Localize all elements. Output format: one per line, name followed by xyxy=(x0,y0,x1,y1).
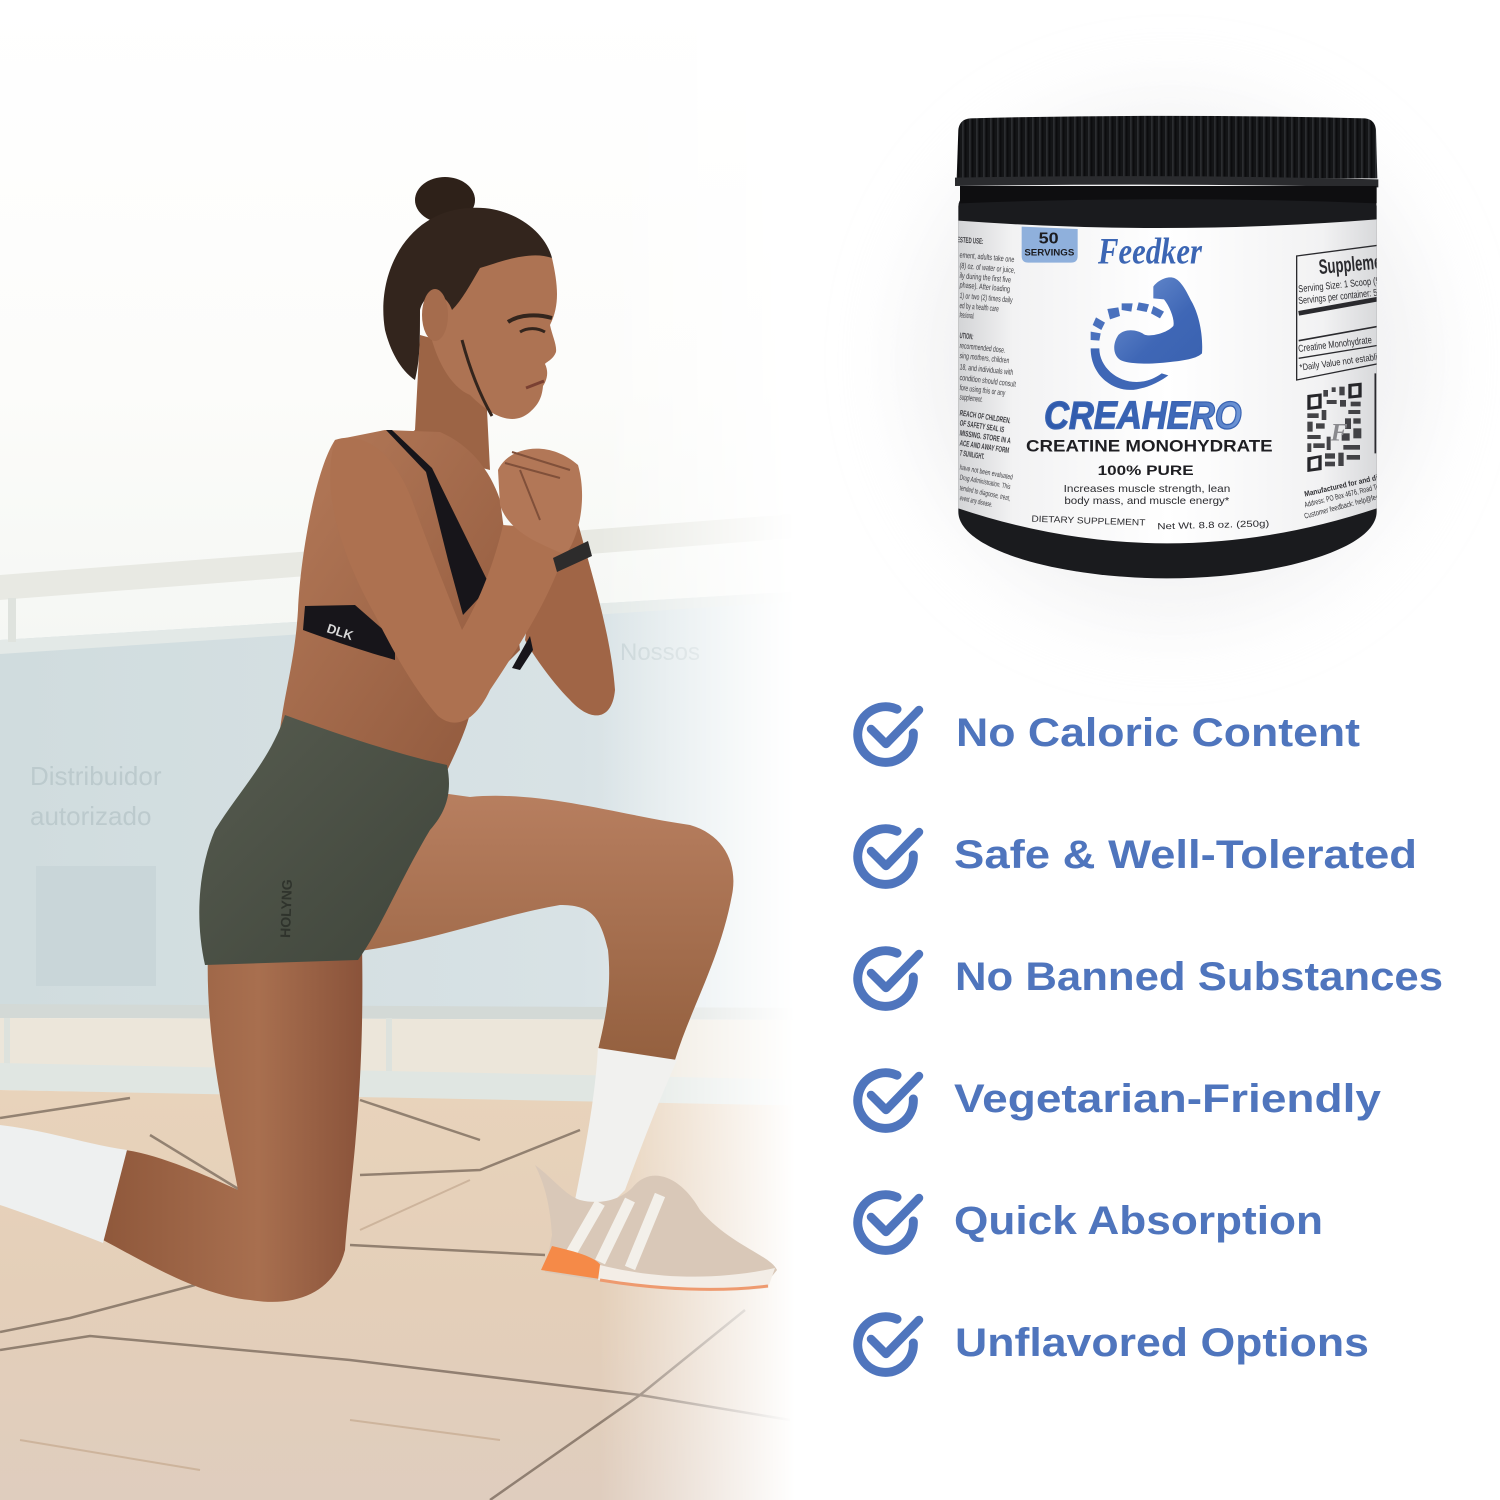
wristwatch xyxy=(553,541,592,572)
supplement facts panel xyxy=(1297,245,1395,453)
left side directions text: tended to diagnose, treat, xyxy=(959,483,1011,503)
left side directions text: ACE AND AWAY FORM xyxy=(959,438,1010,455)
QR code: F xyxy=(1330,419,1348,447)
servings tag xyxy=(1022,227,1078,263)
flexed arm logo xyxy=(1091,277,1202,390)
servings tag: 50 xyxy=(1039,231,1059,248)
torso xyxy=(280,430,520,785)
left side directions text: fore using this or any xyxy=(959,383,1006,398)
left side directions text: ement, adults take one xyxy=(959,250,1015,264)
photo: background scene with terrace wall, rails and floor: Nossos xyxy=(620,639,700,666)
left side directions text: OF SAFETY SEAL IS xyxy=(959,418,1005,434)
back sock xyxy=(0,1125,127,1243)
net weight line: Net Wt. 8.8 oz. (250g) xyxy=(1157,518,1269,531)
left side directions text: recommended dose. xyxy=(959,341,1006,355)
back leg xyxy=(103,945,362,1302)
QR code xyxy=(1307,383,1362,472)
left side directions text: phase). After loading xyxy=(959,280,1010,294)
left side directions text: MISSING. STORE IN A xyxy=(959,428,1012,445)
photo: background scene with terrace wall, rails and floor xyxy=(0,514,784,1500)
benefit: unflavored options xyxy=(858,1317,1369,1372)
photo: woman in lunge pose xyxy=(0,177,777,1302)
left side directions text: GGESTED USE: xyxy=(950,235,984,246)
left side directions text: supplement. xyxy=(959,392,983,404)
left side directions text: T SUNLIGHT. xyxy=(959,448,985,461)
manufacturer text xyxy=(1304,474,1377,518)
benefit copy xyxy=(1064,484,1230,507)
supplement facts panel: Creatine Monohydrate xyxy=(1298,335,1373,355)
shorts: HOLYNG xyxy=(277,879,295,938)
manufacturer text: Customer feedback: help@feedker xyxy=(1303,489,1391,521)
manufacturer text: Manufactured for and distributed xyxy=(1303,467,1406,499)
left side directions text: ed by a health care xyxy=(959,301,999,313)
benefits checklist xyxy=(858,707,1443,1372)
left side directions text xyxy=(958,236,1016,507)
net weight line xyxy=(1031,514,1269,531)
product jar shadow halo xyxy=(910,100,1430,620)
face xyxy=(425,252,557,419)
left side directions text: UTION: xyxy=(959,331,974,341)
benefit copy: Increases muscle strength, lean xyxy=(1064,484,1230,495)
product jar xyxy=(950,116,1406,578)
sports bra xyxy=(303,430,533,670)
benefit: safe and well-tolerated xyxy=(858,829,1417,884)
left side directions text: (8) oz. of water or juice, xyxy=(959,261,1016,275)
purity claim: 100% PURE xyxy=(1098,463,1194,478)
supplement facts panel: Serving Size: 1 Scoop (5g) xyxy=(1298,275,1387,295)
benefit: unflavored options: Unflavored Options xyxy=(955,1321,1369,1365)
left side directions text: 18, and individuals with xyxy=(959,362,1014,377)
sports bra: DLK xyxy=(325,621,356,643)
benefit copy: body mass, and muscle energy* xyxy=(1064,496,1230,507)
running shoe xyxy=(535,1165,777,1291)
benefit: quick absorption xyxy=(858,1195,1323,1250)
jar label xyxy=(950,219,1406,543)
benefit: no caloric content xyxy=(858,707,1360,762)
clasped hands xyxy=(498,449,582,555)
left side directions text: Drug Administration. This xyxy=(959,472,1012,491)
benefit: no banned substances xyxy=(858,951,1443,1006)
product subtitle: CREATINE MONOHYDRATE xyxy=(1026,437,1273,456)
brand name: Feedker xyxy=(1097,231,1202,272)
photo: background scene with terrace wall, rails and floor: Distribuidor xyxy=(30,761,162,791)
jar lid xyxy=(955,116,1378,203)
benefit: no banned substances: No Banned Substances xyxy=(955,955,1443,999)
manufacturer text: Address: PO Box 4676, Road Town xyxy=(1303,480,1386,509)
front sock xyxy=(574,1048,677,1205)
left side directions text: ily during the first five xyxy=(959,271,1012,285)
supplement facts panel: Supplement xyxy=(1318,250,1395,279)
left side directions text: fessional. xyxy=(959,310,975,321)
supplement facts panel: *Daily Value not established xyxy=(1299,350,1394,373)
benefit: vegetarian-friendly xyxy=(858,1073,1382,1128)
left side directions text: condition should consult xyxy=(959,373,1017,389)
servings tag: SERVINGS xyxy=(1024,248,1074,258)
net weight line: DIETARY SUPPLEMENT xyxy=(1031,514,1146,528)
product name: CREAHERO xyxy=(1044,393,1242,437)
left side directions text: REACH OF CHILDREN. xyxy=(959,408,1011,425)
far arm xyxy=(525,490,615,715)
benefit: quick absorption: Quick Absorption xyxy=(954,1199,1323,1243)
neck xyxy=(395,335,490,470)
left side directions text: 1) or two (2) times daily xyxy=(959,291,1013,305)
benefit: no caloric content: No Caloric Content xyxy=(956,711,1360,755)
benefit: vegetarian-friendly: Vegetarian-Friendly xyxy=(954,1077,1382,1121)
left side directions text: event any disease. xyxy=(959,493,993,509)
photo: background scene with terrace wall, rails and floor: autorizado xyxy=(30,801,151,831)
front leg xyxy=(350,790,733,1060)
benefit: safe and well-tolerated: Safe & Well-Tolerated xyxy=(954,833,1417,877)
jar body xyxy=(958,193,1377,578)
near arm xyxy=(330,438,570,723)
hair and bun xyxy=(383,177,552,416)
shorts xyxy=(199,715,449,965)
left side directions text: have not been evaluated xyxy=(959,462,1014,482)
left side directions text: sing mothers, children xyxy=(959,351,1010,365)
supplement facts panel: Servings per container: 50 xyxy=(1298,287,1382,307)
